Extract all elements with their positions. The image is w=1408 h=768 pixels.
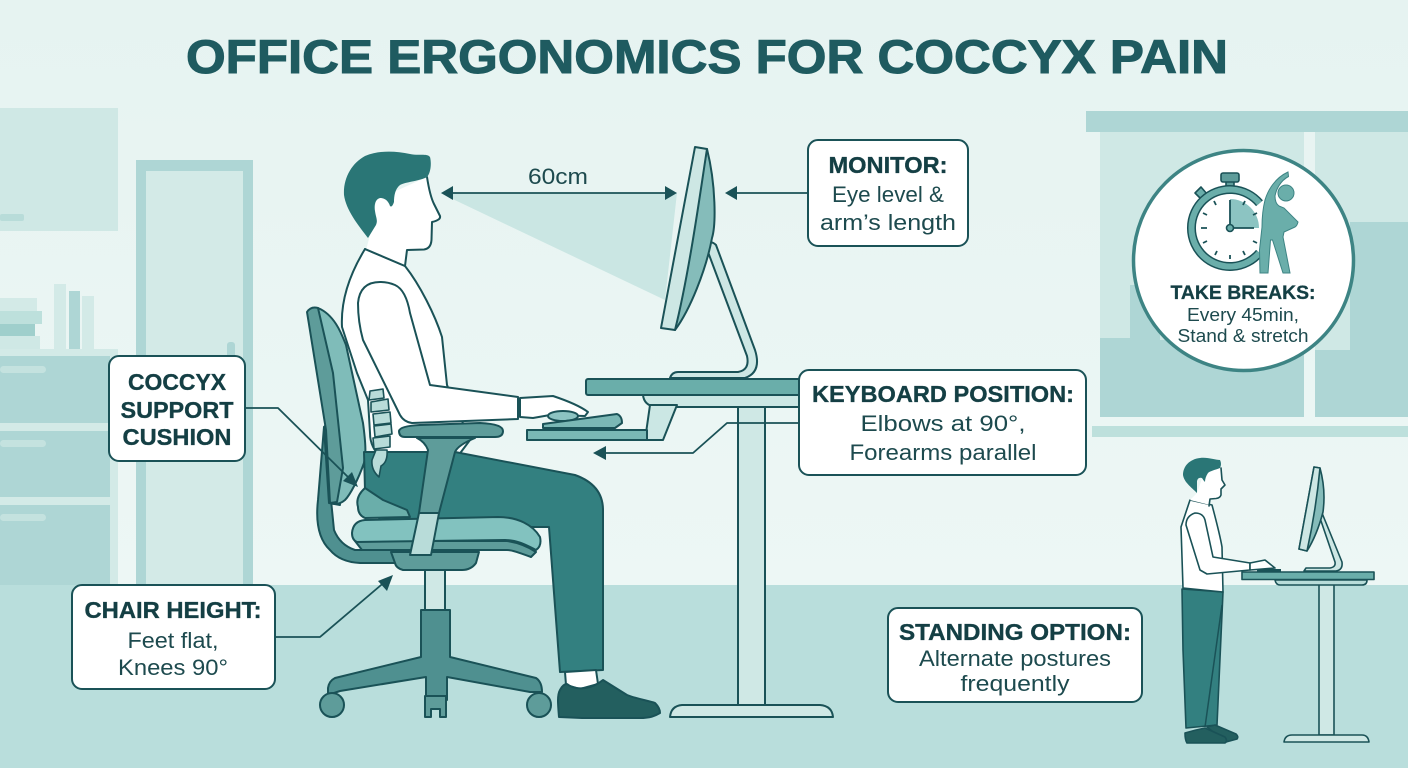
arrow: keyboard	[593, 423, 799, 460]
callout: standing option: frequently	[960, 671, 1070, 696]
seat cushion	[352, 517, 540, 550]
badge text: Stand & stretch	[1178, 326, 1308, 346]
chair back support	[317, 427, 400, 563]
standing head	[1190, 466, 1225, 505]
arrow: monitor	[725, 186, 808, 200]
callout: coccyx support cushion: COCCYX	[128, 369, 227, 395]
standing arm	[1186, 513, 1250, 574]
callout: chair height: Feet flat,	[128, 628, 218, 653]
hand	[520, 396, 588, 418]
background wall	[0, 0, 1408, 585]
background: books and cabinet	[0, 284, 118, 585]
keyboard tray	[527, 430, 647, 440]
desk leg	[738, 405, 765, 706]
callout: monitor	[808, 140, 968, 246]
monitor screen	[661, 147, 707, 330]
callout: standing option	[888, 608, 1142, 702]
spine	[369, 389, 392, 477]
desk base	[670, 705, 833, 717]
seated person	[342, 152, 660, 718]
callout: chair height: CHAIR HEIGHT:	[84, 597, 262, 623]
callout: coccyx support cushion: SUPPORT	[120, 397, 234, 423]
standing workstation	[1181, 458, 1374, 743]
callout: monitor: Eye level &	[832, 182, 944, 207]
monitor	[661, 147, 757, 378]
armrest lower sleeve	[410, 513, 439, 555]
badge text: Every 45min,	[1187, 305, 1299, 325]
standing hair	[1183, 458, 1221, 493]
left caster	[320, 693, 344, 717]
gas column	[425, 570, 445, 610]
standing desk underside	[1275, 580, 1367, 585]
seat base	[391, 552, 479, 570]
background: window	[1086, 111, 1408, 437]
standing monitor	[1299, 467, 1324, 551]
arrow: coccyx support	[245, 408, 358, 487]
standing keyboard	[1257, 569, 1281, 572]
icon: stretching figure	[1260, 172, 1298, 273]
sock	[565, 670, 598, 689]
face outline	[405, 177, 440, 266]
chair	[307, 308, 551, 717]
standing hand	[1250, 560, 1275, 570]
monitor stand	[670, 242, 757, 378]
callout: standing option: STANDING OPTION:	[899, 619, 1131, 645]
keyboard	[543, 414, 622, 428]
pants	[364, 452, 603, 672]
title: OFFICE ERGONOMICS FOR COCCYX PAIN	[186, 30, 1228, 83]
callout: keyboard position: Elbows at 90°,	[860, 411, 1026, 436]
gaze cone	[440, 193, 677, 300]
backrest rear pad	[324, 420, 340, 505]
standing front shoe	[1185, 728, 1226, 743]
mouse	[548, 411, 578, 421]
desk top	[586, 379, 808, 395]
standing pants	[1182, 589, 1223, 728]
badge text	[1170, 283, 1316, 346]
standing rear shoe	[1207, 725, 1238, 742]
desk underside	[643, 395, 805, 407]
callout: coccyx support cushion: CUSHION	[122, 424, 232, 450]
callout: chair height	[72, 585, 275, 689]
icon: stopwatch	[1191, 173, 1260, 266]
arrow: chair height	[275, 575, 393, 637]
armrest stem	[417, 438, 475, 513]
backrest	[318, 308, 365, 504]
callout: keyboard position: Forearms parallel	[850, 440, 1036, 465]
60cm distance arrow: 60cm	[528, 164, 588, 189]
standing monitor screen	[1299, 467, 1320, 551]
arm	[358, 282, 518, 423]
badge: take breaks	[1134, 150, 1354, 370]
armrest pad	[399, 423, 503, 437]
callout: chair height: Knees 90°	[118, 655, 228, 680]
standing desk leg	[1319, 583, 1334, 735]
star base	[328, 610, 542, 700]
center caster	[425, 696, 446, 717]
callout: coccyx support cushion	[109, 356, 245, 461]
callout: monitor: MONITOR:	[828, 152, 948, 178]
callout: keyboard position: KEYBOARD POSITION:	[812, 381, 1074, 407]
floor	[0, 585, 1408, 768]
coccyx cushion	[357, 488, 410, 518]
callout: keyboard position	[799, 370, 1086, 475]
head and neck	[366, 177, 440, 266]
60cm distance arrow	[441, 164, 677, 200]
right caster	[527, 693, 551, 717]
standing person	[1181, 458, 1275, 743]
standing desk top	[1242, 572, 1374, 580]
collar	[365, 249, 405, 266]
callout: standing option: Alternate postures	[919, 646, 1111, 671]
torso	[342, 249, 470, 460]
backrest rear strip	[307, 308, 343, 503]
background: wall panel	[0, 108, 118, 231]
seat underside	[355, 541, 536, 557]
standing desk base	[1284, 735, 1369, 742]
keyboard tray support	[645, 405, 677, 440]
badge text: TAKE BREAKS:	[1170, 283, 1316, 304]
background: door	[136, 160, 253, 585]
desk	[527, 379, 833, 717]
callout: monitor: arm’s length	[820, 210, 956, 235]
shoe	[558, 680, 660, 718]
hair	[344, 152, 431, 238]
standing monitor stand	[1304, 513, 1342, 571]
monitor back	[675, 149, 715, 330]
standing torso	[1181, 500, 1223, 592]
seat assembly	[352, 423, 540, 570]
